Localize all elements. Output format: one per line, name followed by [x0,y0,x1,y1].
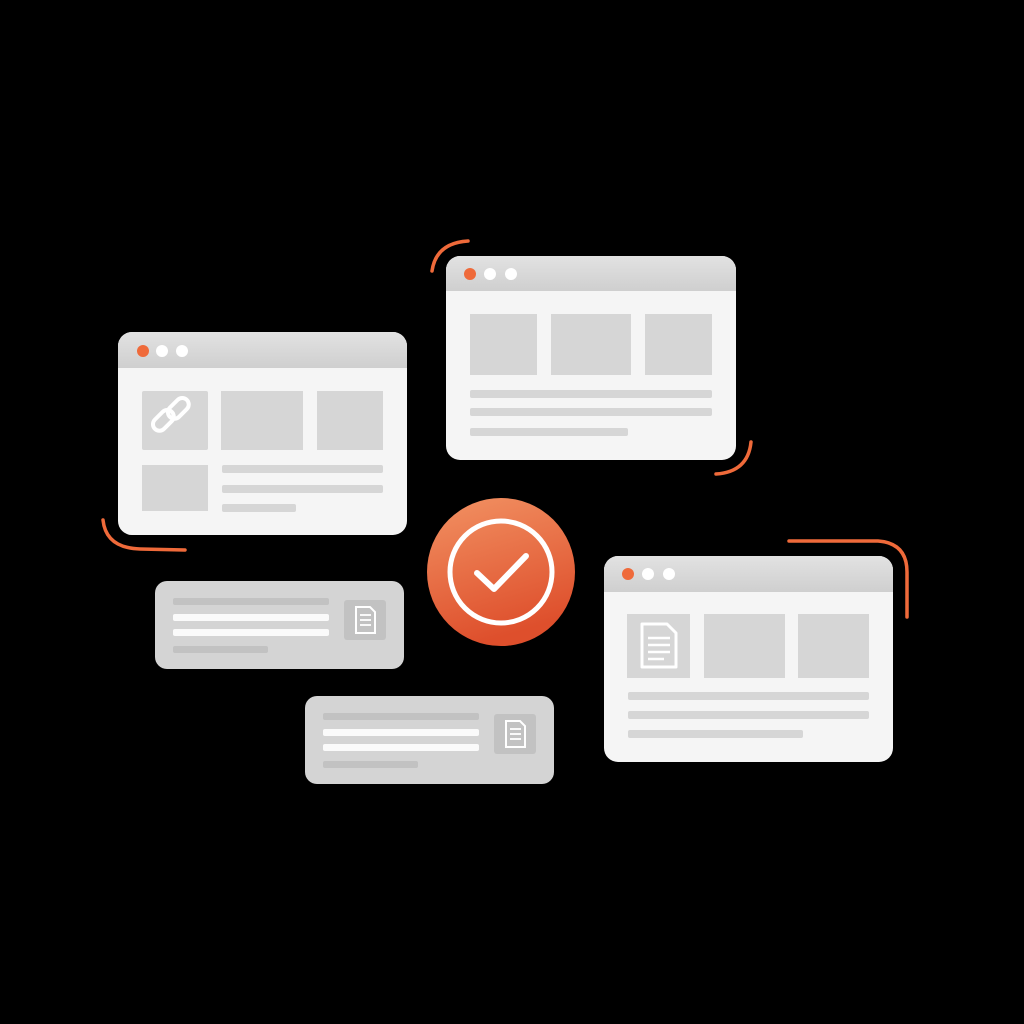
window 1: link page [118,332,407,535]
icon: link [142,391,208,450]
icon: verified check badge [427,498,575,646]
arc: window 2 bottom-right accent [716,442,751,474]
arc: window 3 top-right accent [789,541,907,617]
icon: document small [344,600,386,640]
card 1: search result [155,581,404,669]
icon: document [627,614,690,678]
arc: window 2 top-left accent [432,241,468,271]
arc: window 1 bottom-left accent [103,520,185,550]
icon: document small [494,714,536,754]
window 2: gallery page [446,256,736,460]
window 3: document page [604,556,893,762]
card 2: search result [305,696,554,784]
